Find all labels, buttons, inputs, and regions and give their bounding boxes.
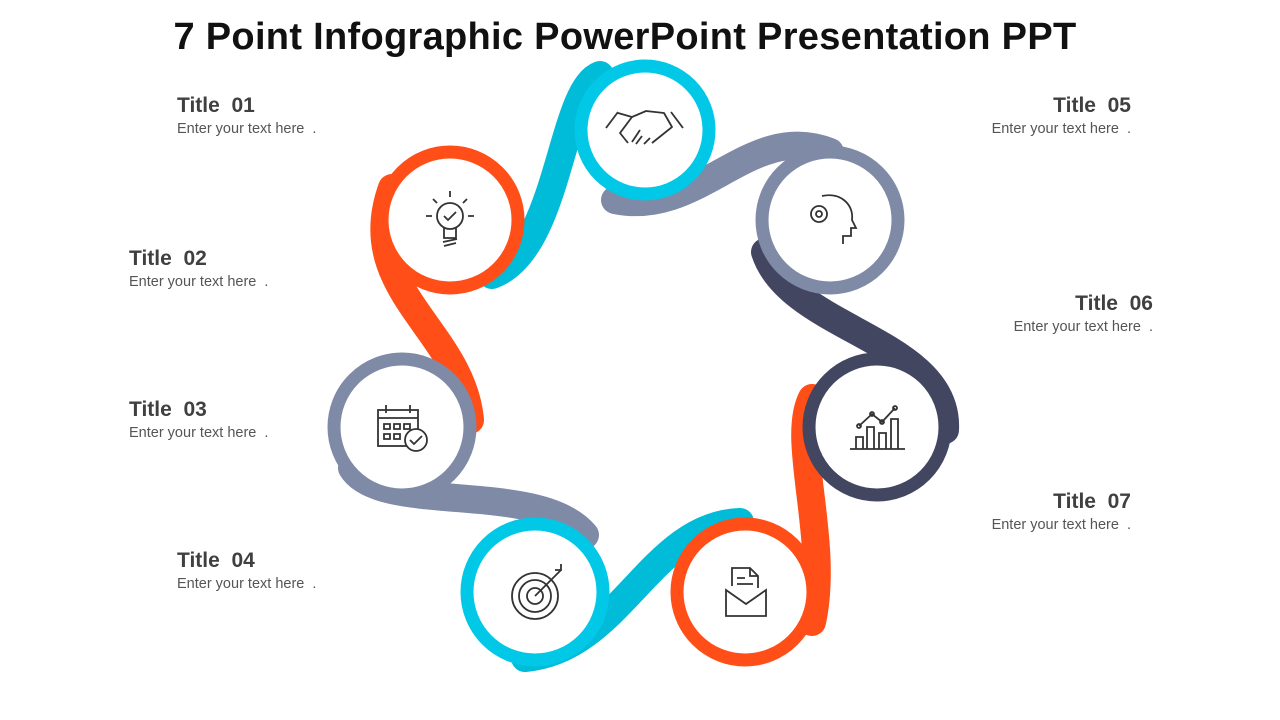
circle 4: target: [467, 524, 603, 660]
circle 5: gear head: [762, 152, 898, 288]
text: title 03: Title 03: [129, 398, 207, 421]
circle 3: calendar: [334, 359, 470, 495]
circle 1: handshake: [581, 66, 709, 194]
text: title 07: Title 07: [1053, 490, 1131, 513]
circle 7: mail: [677, 524, 813, 660]
text: title 05: [992, 94, 1131, 137]
text: title 07: Enter your text here .: [992, 517, 1131, 533]
text: title 01: Title 01: [177, 94, 255, 117]
text: title 01: [177, 94, 316, 137]
text: title 04: Enter your text here .: [177, 576, 316, 592]
circle 2: bulb: [382, 152, 518, 288]
text: title 06: [1014, 292, 1153, 335]
ribbons: [352, 75, 945, 658]
text: title 05: Enter your text here .: [992, 121, 1131, 137]
text: title 01: Enter your text here .: [177, 121, 316, 137]
text: title 05: Title 05: [1053, 94, 1131, 117]
text: title 04: Title 04: [177, 549, 255, 572]
text: title 02: Title 02: [129, 247, 207, 270]
text: title 07: [992, 490, 1131, 533]
text: title 06: Enter your text here .: [1014, 319, 1153, 335]
title: 7 Point Infographic PowerPoint Presentation PPT: [174, 16, 1076, 58]
text: title 06: Title 06: [1075, 292, 1153, 315]
text: title 03: [129, 398, 268, 441]
text: title 02: [129, 247, 268, 290]
text: title 04: [177, 549, 316, 592]
circle 6: chart: [809, 359, 945, 495]
text: title 03: Enter your text here .: [129, 425, 268, 441]
text: title 02: Enter your text here .: [129, 274, 268, 290]
